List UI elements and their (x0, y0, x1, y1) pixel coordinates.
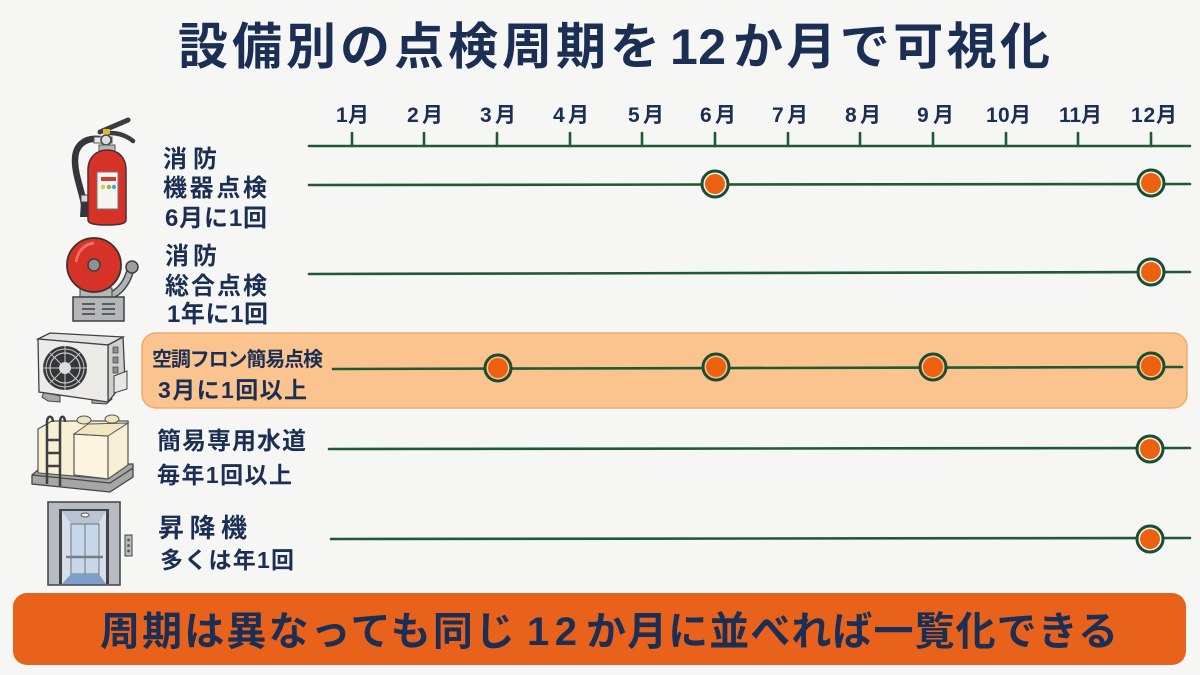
text: simplified water supply (157, 428, 306, 488)
text: fire equipment inspection (163, 146, 267, 232)
icon: elevator (48, 502, 132, 585)
month axis: 3月 (480, 104, 516, 127)
icon: fire alarm bell (67, 238, 138, 321)
month axis: 8月 (845, 104, 881, 127)
month axis: 5月 (628, 104, 664, 127)
text: general fire inspection: 1年に1回 (167, 301, 268, 328)
timeline: air conditioner inspection (333, 353, 1182, 381)
timeline: simplified water supply (329, 436, 1190, 462)
month axis: 12月 (1131, 104, 1177, 127)
panel: highlighted air conditioner row (142, 333, 1187, 408)
text: general fire inspection: 総合点検 (165, 273, 267, 300)
icon: fire extinguisher (75, 120, 133, 225)
month axis: 7月 (772, 104, 808, 127)
timeline: fire equipment inspection (309, 170, 1190, 197)
text: elevator inspection (158, 513, 294, 573)
text: elevator inspection: 昇降機 (158, 513, 247, 543)
icon: outdoor air conditioner unit (38, 333, 127, 404)
month axis: 4月 (553, 104, 589, 127)
icon: water tank (32, 415, 133, 492)
text: general fire inspection: 消防 (165, 243, 217, 270)
timeline: general fire inspection (309, 259, 1190, 285)
month axis: 9月 (917, 104, 954, 127)
month axis: 6月 (700, 104, 736, 127)
month axis: 1月 (336, 104, 369, 127)
text: air conditioner inspection: 3月に1回以上 (158, 377, 307, 403)
text: general fire inspection (165, 243, 268, 328)
month axis: 2月 (407, 104, 443, 127)
callout: summary banner (13, 593, 1186, 665)
text: elevator inspection: 多くは年1回 (160, 547, 294, 573)
text: fire equipment inspection: 機器点検 (163, 175, 267, 202)
text: air conditioner inspection (152, 348, 323, 403)
text: fire equipment inspection: 消防 (163, 146, 217, 173)
text: fire equipment inspection: 6月に1回 (165, 205, 267, 232)
text: air conditioner inspection: 空調フロン簡易点検 (152, 348, 323, 371)
text: simplified water supply: 簡易専用水道 (157, 428, 306, 455)
callout: summary banner: 12 (527, 610, 577, 654)
callout: summary banner: 周期は異なっても同じ (100, 610, 515, 654)
title: 設備別の点検周期を (178, 19, 660, 75)
callout: summary banner: か月に並べれば一覧化できる (586, 610, 1118, 654)
timeline: elevator inspection (331, 526, 1190, 552)
title: 12 (670, 19, 726, 75)
title (178, 19, 1050, 75)
title: か月で可視化 (733, 19, 1050, 75)
month axis (309, 104, 1190, 146)
month axis: 11月 (1059, 104, 1102, 127)
text: simplified water supply: 毎年1回以上 (157, 462, 292, 488)
month axis: 10月 (986, 104, 1031, 127)
